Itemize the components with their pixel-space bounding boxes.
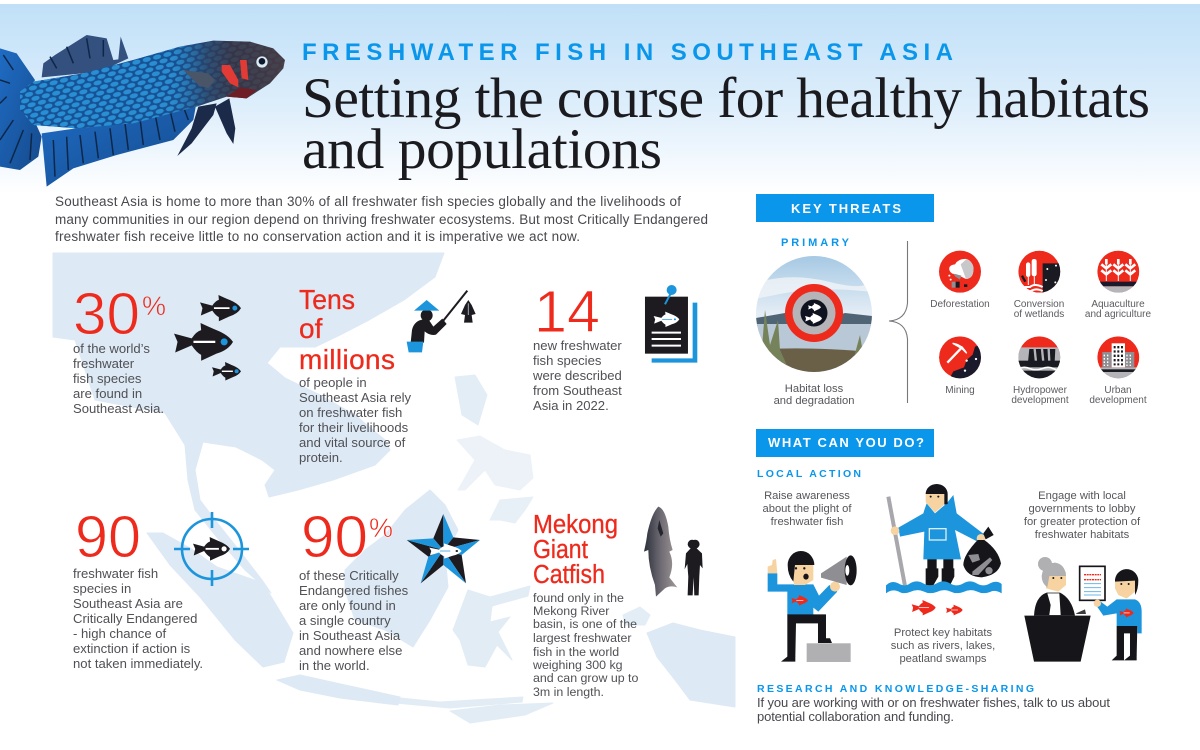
stat: 90 critically endangered: 90: [75, 504, 141, 570]
threat labels: and agriculture: [1085, 309, 1152, 320]
stat: Mekong giant catfish: Mekong River: [533, 604, 609, 618]
threat labels: Aquaculture: [1091, 299, 1145, 310]
icon: deforestation: [939, 251, 981, 293]
protect habitats text: [891, 627, 995, 665]
stat: Mekong giant catfish: Giant: [533, 536, 588, 564]
illustration: person cleaning river: [886, 484, 1002, 615]
icon: mining: [939, 336, 983, 381]
threat labels: Mining: [945, 385, 975, 396]
primary threat photo with icon: [751, 256, 872, 372]
stat: 14 new species: 14: [534, 279, 600, 345]
map of Southeast Asia: [53, 253, 735, 723]
stat: 90 percent endemic: 90: [301, 504, 368, 570]
research heading: RESEARCH AND KNOWLEDGE-SHARING: [757, 683, 1034, 695]
primary threat label: Habitat loss: [785, 383, 844, 395]
stat: 90 percent endemic: a single country: [299, 613, 391, 628]
research text: If you are working with or on freshwater fishes, talk to us about: [757, 695, 1110, 710]
image: giant catfish and human for scale: [644, 507, 703, 597]
icon: hydropower development: [1018, 336, 1063, 379]
stat: 90 critically endangered: [73, 504, 203, 671]
threat labels: development: [1089, 395, 1147, 406]
fish body: [20, 41, 285, 128]
stat: Mekong giant catfish: fish in the world: [533, 645, 619, 659]
stat: 14 new species: fish species: [533, 353, 602, 368]
stat: 90 percent endemic: of these Critically: [299, 568, 399, 583]
engage governments text: Engage with local: [1038, 490, 1126, 502]
icon: urban development: [1097, 336, 1139, 379]
stat: 90 percent endemic: [299, 504, 409, 673]
eye: [256, 56, 268, 68]
engage governments text: [1024, 490, 1141, 541]
hero photo-style fighting fish: [0, 35, 285, 187]
stat: Mekong giant catfish: Mekong: [533, 511, 618, 539]
local action heading: LOCAL ACTION: [757, 468, 861, 480]
stat: tens of millions: millions: [299, 344, 395, 375]
threat labels: [930, 299, 1152, 406]
stat: tens of millions: on freshwater fish: [299, 405, 402, 420]
stat: 30 percent: are found in: [73, 386, 142, 401]
stat: 90 critically endangered: species in: [73, 581, 131, 596]
stat: tens of millions: Southeast Asia rely: [299, 390, 412, 405]
stat: 90 percent endemic: are only found in: [299, 598, 396, 613]
stat: 14 new species: [532, 279, 622, 413]
primary threat label: [774, 383, 854, 407]
stat: 30 percent: of the world’s: [73, 341, 150, 356]
stat: 90 percent endemic: %: [369, 513, 393, 543]
main title: [302, 67, 1150, 181]
stat: 30 percent: fish species: [73, 371, 142, 386]
stat: 14 new species: were described: [532, 368, 622, 383]
tail fin: [0, 48, 42, 170]
stat: tens of millions: of people in: [299, 375, 367, 390]
anal fin: [42, 102, 197, 187]
stat: 90 critically endangered: Southeast Asia are: [73, 596, 183, 611]
stat: Mekong giant catfish: weighing 300 kg: [532, 658, 623, 672]
threat labels: Urban: [1104, 385, 1132, 396]
brace connector: [889, 241, 908, 403]
primary label: PRIMARY: [781, 237, 850, 249]
eyebrow heading: FRESHWATER FISH IN SOUTHEAST ASIA: [302, 39, 953, 66]
icon: conversion of wetlands: [1018, 251, 1060, 293]
raise awareness text: Raise awareness: [764, 490, 850, 502]
stat: 90 percent endemic: in the world.: [299, 658, 370, 673]
raise awareness text: freshwater fish: [771, 516, 843, 528]
intro paragraph: many communities in our region depend on thriving freshwater ecosystems. But most Critically Endangered: [55, 212, 708, 227]
main title: and populations: [302, 118, 662, 181]
stat: 90 critically endangered: freshwater fish: [73, 566, 158, 581]
threat labels: Deforestation: [930, 299, 990, 310]
stat: Mekong giant catfish: found only in the: [533, 591, 624, 605]
stat: 90 percent endemic: and nowhere else: [299, 643, 402, 658]
stat: 30 percent: [73, 281, 166, 416]
icon: fish in crosshair: [174, 512, 249, 586]
threat labels: Conversion: [1014, 299, 1064, 310]
stat: tens of millions: Tens: [299, 284, 355, 315]
protect habitats text: Protect key habitats: [894, 627, 993, 639]
intro paragraph: [55, 194, 708, 244]
engage governments text: for greater protection of: [1024, 516, 1141, 528]
threat labels: Hydropower: [1013, 385, 1068, 396]
stat: 14 new species: new freshwater: [533, 338, 622, 353]
stat: Mekong giant catfish: basin, is one of the: [533, 617, 637, 631]
stat: 14 new species: from Southeast: [533, 383, 622, 398]
icon: document with fish: [645, 285, 697, 363]
stat: 90 percent endemic: Endangered fishes: [299, 583, 409, 598]
stat: Mekong giant catfish: 3m in length.: [533, 685, 604, 699]
engage governments text: governments to lobby: [1029, 503, 1136, 515]
threat labels: of wetlands: [1014, 309, 1064, 320]
key threats banner: [756, 194, 934, 222]
research text: [757, 695, 1110, 724]
gill fin: [183, 70, 215, 88]
stat: tens of millions: for their livelihoods: [299, 420, 409, 435]
stat: 30 percent: Southeast Asia.: [73, 401, 164, 416]
scale texture: [20, 41, 285, 128]
stat: 90 critically endangered: extinction if action is: [73, 641, 191, 656]
raise awareness text: [763, 490, 852, 528]
dorsal fin: [42, 35, 128, 77]
stat: tens of millions: protein.: [299, 450, 343, 465]
stat: Mekong giant catfish: Catfish: [533, 561, 605, 589]
header sky background: [0, 4, 1200, 194]
stat: 30 percent: freshwater: [73, 356, 135, 371]
stat: Mekong giant catfish: and can grow up to: [533, 671, 639, 685]
stat: 14 new species: Asia in 2022.: [533, 398, 609, 413]
stat: 30 percent: %: [142, 291, 166, 321]
what can you do banner: [756, 429, 934, 457]
illustration: official and citizen at podium: [1024, 557, 1142, 662]
stat: tens of millions: and vital source of: [299, 435, 406, 450]
stat: 90 critically endangered: Critically Endangered: [73, 611, 197, 626]
stat: Mekong giant catfish: [532, 511, 639, 699]
research text: potential collaboration and funding.: [757, 709, 954, 724]
stat: 90 critically endangered: not taken immediately.: [73, 656, 203, 671]
stat: tens of millions: of: [299, 313, 323, 344]
icon: three fish: [174, 295, 241, 381]
stat: Mekong giant catfish: largest freshwater: [533, 631, 631, 645]
stat: 90 percent endemic: in Southeast Asia: [299, 628, 401, 643]
stat: 30 percent: 30: [73, 281, 140, 347]
main title: Setting the course for healthy habitats: [302, 67, 1150, 130]
primary threat label: and degradation: [774, 395, 854, 407]
intro paragraph: Southeast Asia is home to more than 30% of all freshwater fish species globally and the livelihoods of: [55, 194, 681, 209]
intro paragraph: freshwater fish receive little to no conservation action and it is imperative we act now.: [55, 229, 580, 244]
engage governments text: freshwater habitats: [1035, 529, 1130, 541]
key threats banner: KEY THREATS: [791, 201, 901, 216]
icon: star with fish: [407, 514, 480, 583]
raise awareness text: about the plight of: [763, 503, 852, 515]
threat labels: development: [1011, 395, 1069, 406]
illustration: person with megaphone: [768, 551, 857, 662]
pectoral fins: [177, 103, 217, 156]
stat: tens of millions: [299, 284, 412, 465]
icon: fisher with rod: [407, 291, 476, 352]
icon: aquaculture and agriculture: [1097, 251, 1139, 293]
what can you do banner: WHAT CAN YOU DO?: [768, 435, 924, 450]
red cheek markings: [222, 60, 248, 87]
threat icons: [939, 251, 1139, 381]
protect habitats text: such as rivers, lakes,: [891, 640, 995, 652]
stat: 90 critically endangered: - high chance of: [73, 626, 167, 641]
protect habitats text: peatland swamps: [899, 653, 987, 665]
